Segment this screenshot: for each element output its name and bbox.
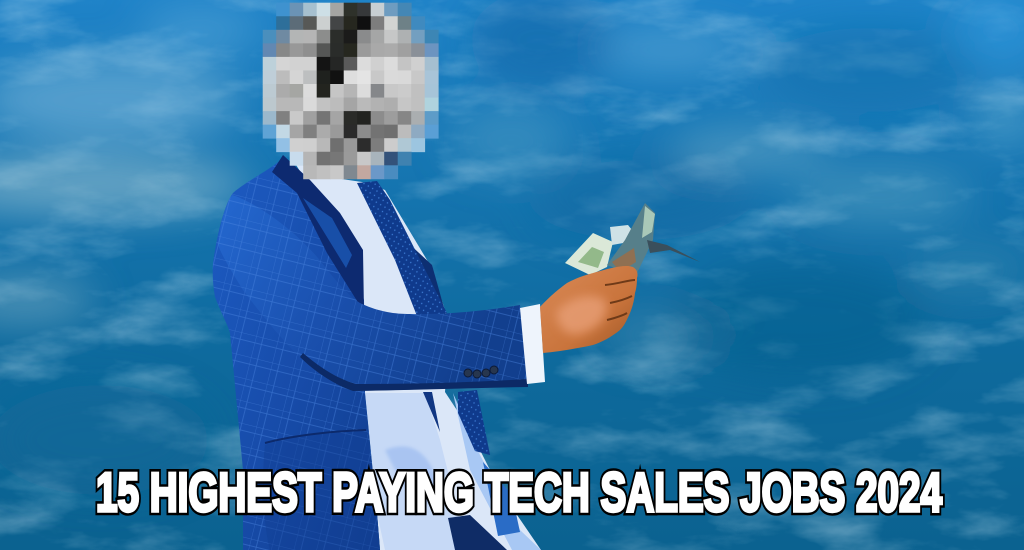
jacket right panel [405,240,448,322]
jacket body [213,158,380,550]
pixelated face mosaic [263,3,439,179]
businessman figure [213,155,700,550]
sleeve [218,195,528,391]
banknotes [565,203,700,275]
shirt cuff [520,304,545,384]
hand [540,266,638,353]
lapel [272,155,364,312]
tie [357,181,490,455]
jacket buttons [464,366,498,378]
shirt [290,155,541,550]
